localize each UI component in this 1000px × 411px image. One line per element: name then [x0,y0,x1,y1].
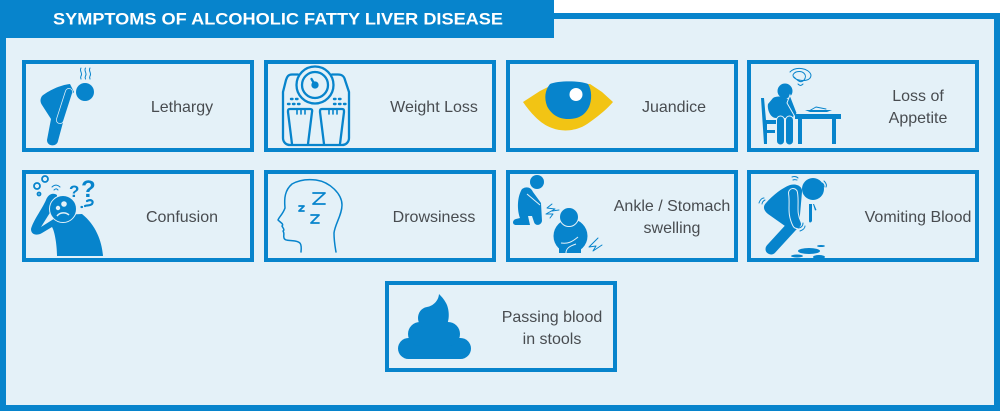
card: Ankle / Stomach swelling: swelling [644,220,700,237]
icon: confused person: ? [69,182,79,201]
label: Vomiting Blood [865,209,971,226]
label: Confusion [146,209,218,226]
label: Juandice [642,99,706,116]
label lines: Loss of [892,88,944,105]
label: Lethargy [151,99,213,116]
icon: vomiting person [759,177,826,259]
icon: head with Zs [278,180,342,252]
icon: confused person: ? [81,176,96,203]
card: Vomiting Blood [749,172,977,260]
icon: person at table [761,68,841,145]
card: Loss of Appetite: Appetite [889,110,947,127]
label lines: Ankle / Stomach [614,198,730,215]
icon: swollen ankle and stomach figures [513,175,602,253]
card: Loss of Appetite [749,62,977,150]
icon: confused person [31,176,103,256]
card: Ankle / Stomach swelling [508,172,736,260]
card: Weight Loss [266,62,494,150]
title banner [0,0,554,38]
card: Confusion [24,172,252,260]
icon: stool [398,294,471,359]
title banner: SYMPTOMS OF ALCOHOLIC FATTY LIVER DISEASE [53,10,503,28]
card: Juandice [508,62,736,150]
card: Passing blood in stools: in stools [523,331,581,348]
icon: bent over figure [40,68,94,145]
icon: yellow eye [523,81,613,130]
card: Lethargy [24,62,252,150]
icon: weighing scale [283,66,349,145]
card: Passing blood in stools [387,283,615,370]
label: Weight Loss [390,99,478,116]
label lines: Passing blood [502,309,602,326]
label: Drowsiness [393,209,475,226]
card: Drowsiness [266,172,494,260]
